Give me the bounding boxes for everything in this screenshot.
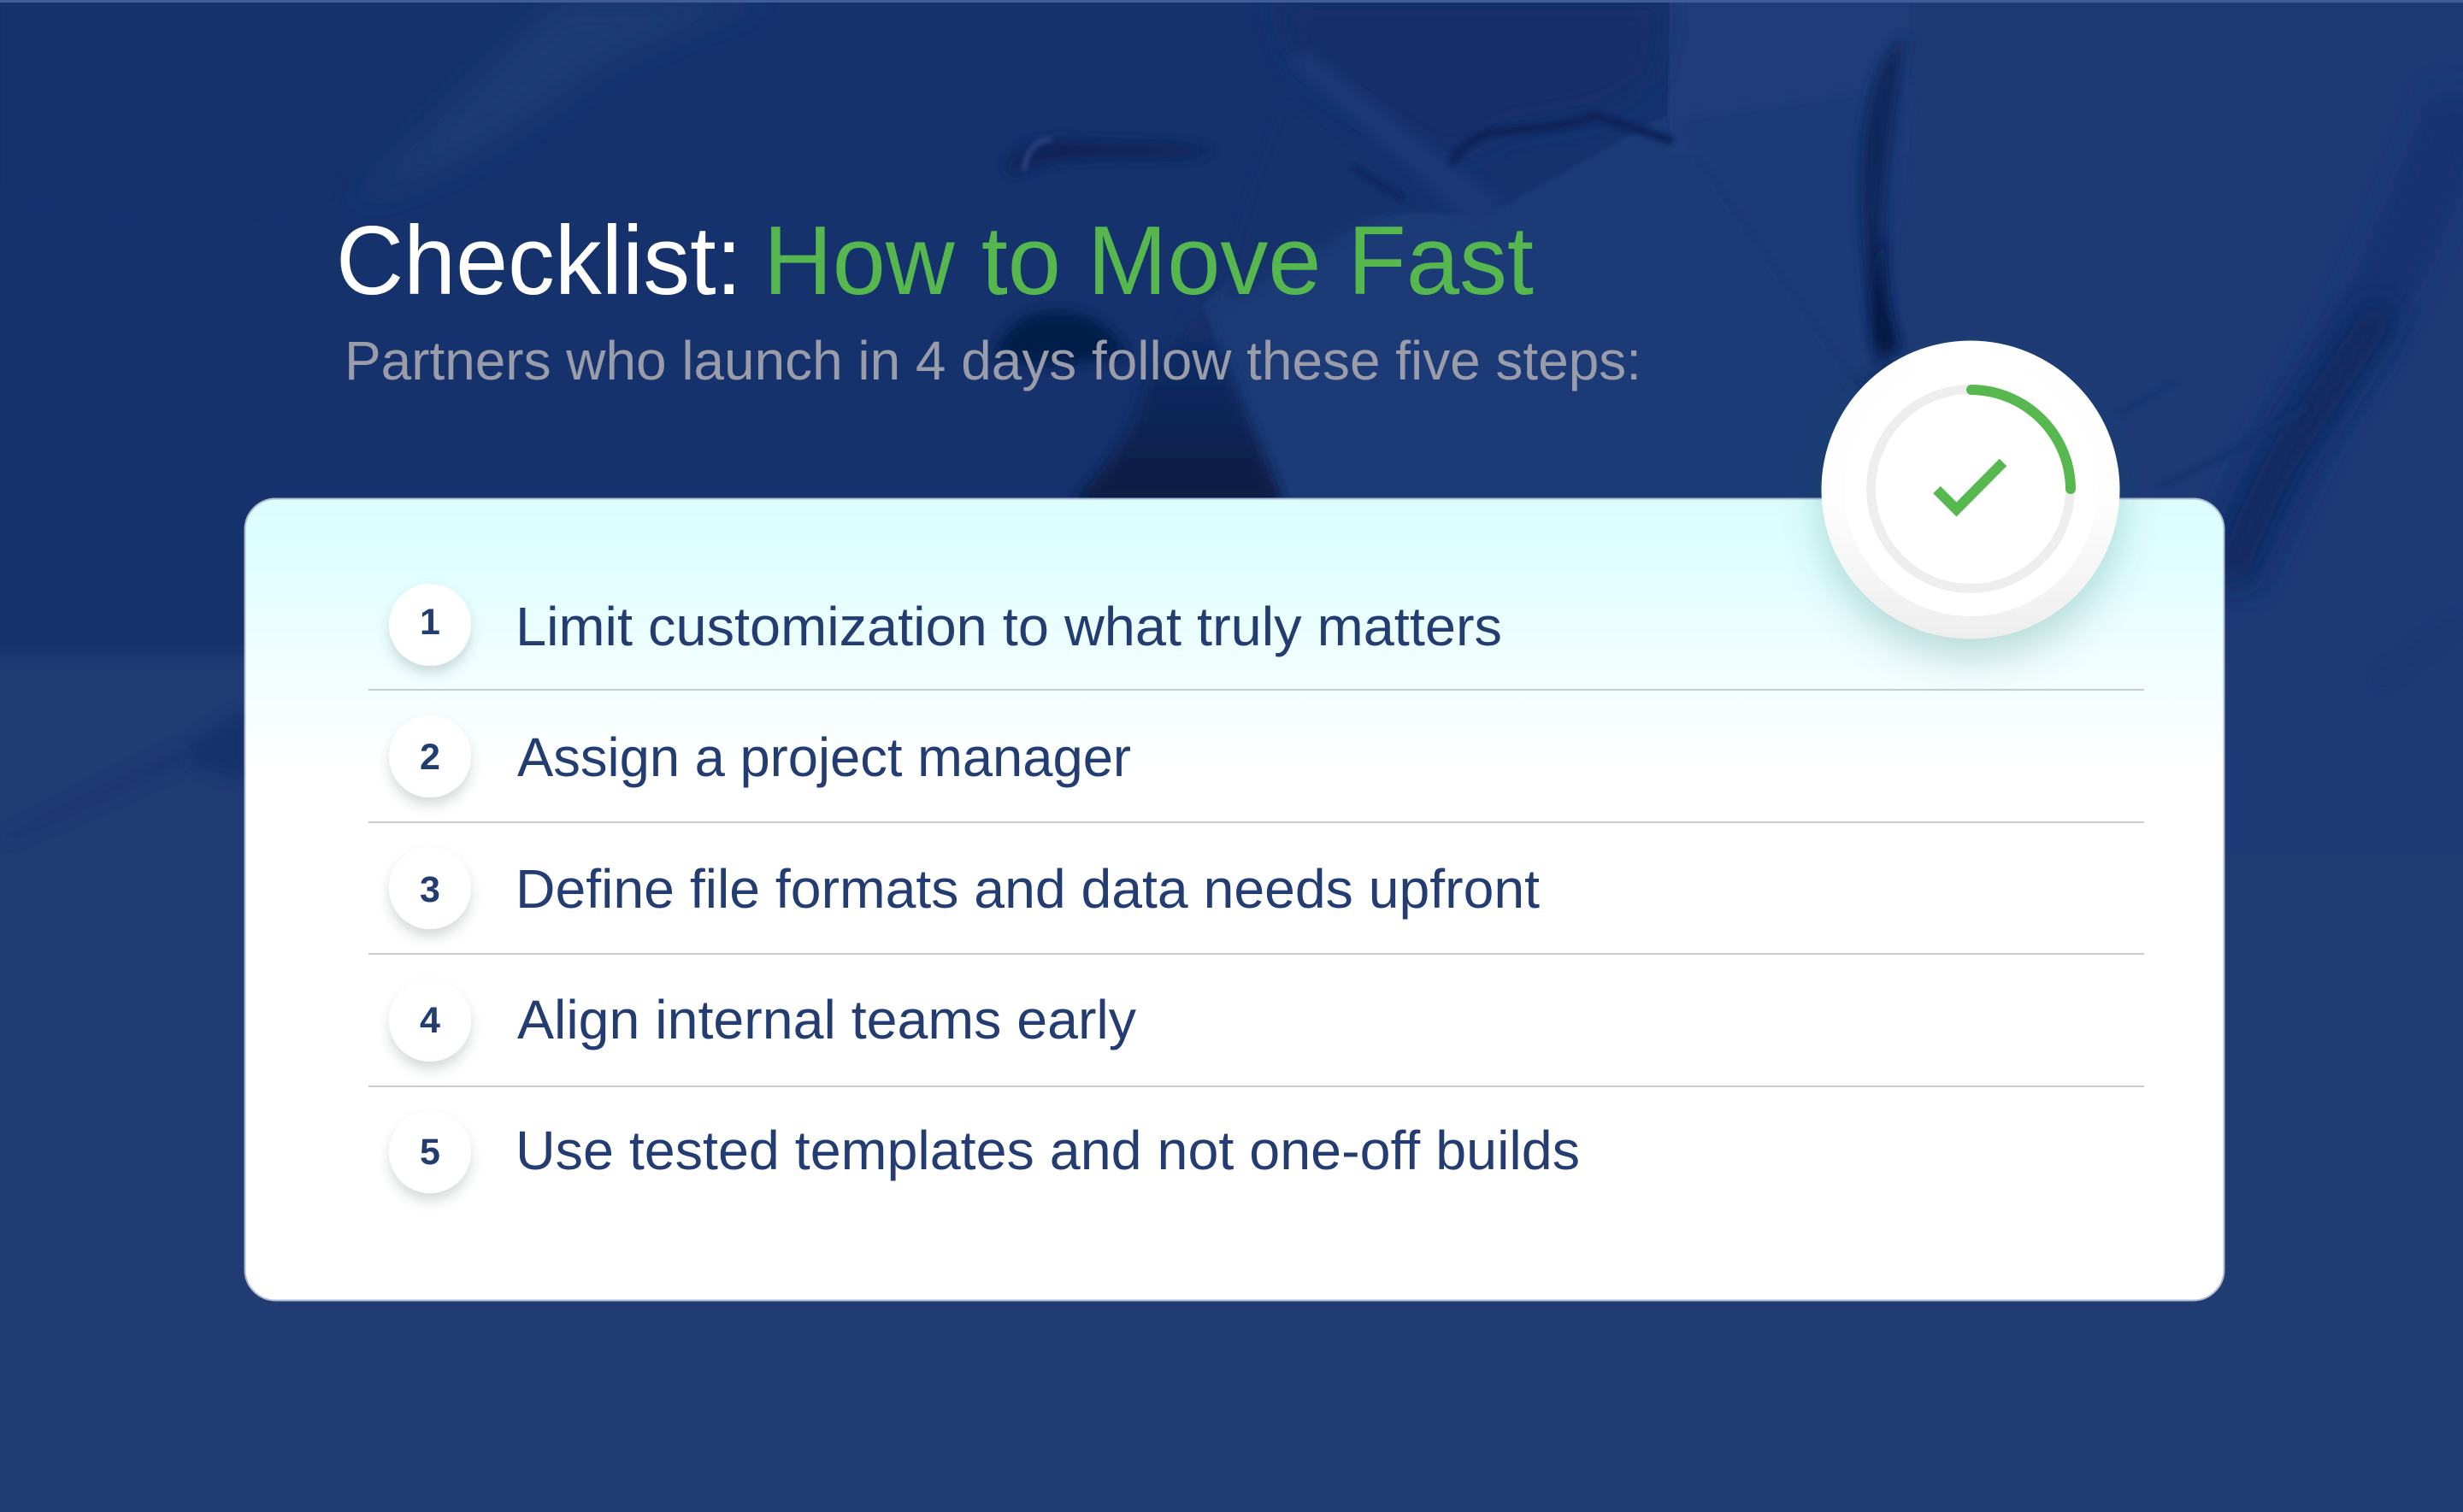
- step 1: 1: [420, 602, 440, 643]
- title: [336, 207, 1534, 315]
- title: Checklist:: [336, 207, 742, 315]
- step 4: Align internal teams early: [517, 989, 1136, 1050]
- step 3: Define file formats and data needs upfront: [516, 858, 1540, 920]
- step 5: Use tested templates and not one-off builds: [516, 1120, 1580, 1181]
- step 2: [389, 715, 1131, 797]
- subtitle: Partners who launch in 4 days follow these five steps:: [345, 330, 1641, 391]
- step 3: 3: [420, 869, 440, 910]
- step 1: Limit customization to what truly matters: [516, 596, 1502, 657]
- step 5: 5: [420, 1132, 440, 1173]
- step 1: [389, 584, 1502, 666]
- step 4: [389, 980, 1136, 1062]
- step 4: 4: [420, 1000, 440, 1041]
- step 5: [389, 1111, 1580, 1193]
- step 2: 2: [420, 737, 440, 778]
- step 2: Assign a project manager: [517, 727, 1131, 788]
- icon: progress ring with check mark: [1821, 340, 2120, 639]
- panel: checklist card: [245, 499, 2224, 1301]
- step 3: [389, 847, 1540, 929]
- title: How to Move Fast: [763, 207, 1534, 315]
